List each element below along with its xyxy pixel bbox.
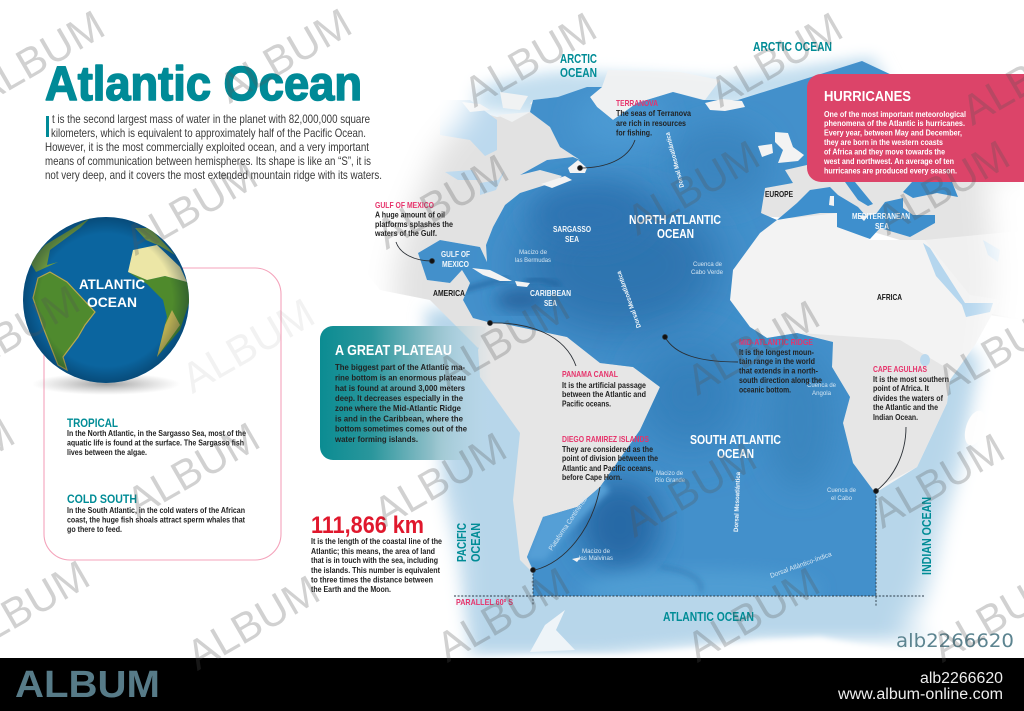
text: coastline	[311, 537, 442, 594]
callout: Terranova: for fishing.	[616, 128, 652, 138]
label: Macizo de Rio Grande: Río Grande	[655, 477, 685, 484]
callout: Diego Ramirez Islands	[562, 434, 658, 482]
land: North America	[340, 80, 580, 348]
label: Gulf of Mexico sea: GULF OF	[441, 249, 470, 259]
text: A Great Plateau: zone where the Mid-Atlantic Ridge	[335, 404, 461, 413]
statistic: coastline length: 111,866 km	[311, 512, 424, 539]
label: Cuenca de Cabo Verde: Cabo Verde	[691, 269, 723, 276]
callout: Mid-Atlantic Ridge	[739, 337, 822, 394]
label: Parallel 60 S: PARALLEL 60º S	[456, 597, 513, 607]
callout: Panama Canal: Pacific oceans.	[562, 400, 611, 408]
label: Africa: AFRICA	[877, 292, 902, 302]
label: Cuenca de Cabo Verde	[691, 261, 723, 276]
label: Cuenca de Cabo Verde: Cuenca de	[693, 261, 722, 268]
text: A Great Plateau: hat is found at around 3,000 meters	[335, 384, 465, 393]
globe	[23, 217, 190, 383]
label: Macizo de las Bermudas	[515, 249, 552, 264]
label: South Atlantic Ocean: OCEAN	[717, 447, 754, 461]
South America on globe	[33, 272, 95, 370]
label: Cuenca de el Cabo: Cuenca de	[827, 487, 856, 494]
parallel 60 S and boundary dotted lines	[454, 492, 925, 606]
islands	[472, 99, 868, 562]
label: Sargasso Sea	[553, 224, 591, 244]
heading: Cold South: COLD SOUTH	[67, 492, 137, 506]
label: Arctic Ocean west: OCEAN	[560, 66, 597, 80]
text: Cold South: go there to feed.	[67, 525, 122, 534]
panel: hurricanes	[807, 74, 1024, 182]
top fade of the map	[440, 20, 1000, 78]
watermarks: ALBUM	[365, 423, 514, 536]
intro paragraph	[45, 112, 382, 182]
label: Atlantic Ocean on globe: ATLANTIC	[79, 276, 145, 292]
left fade of the map	[0, 0, 480, 660]
callout: Cape Agulhas: It is the most southern	[873, 375, 949, 384]
watermarks: ALBUM	[367, 145, 516, 258]
callout: Cape Agulhas: divides the waters of	[873, 394, 943, 403]
label: America: AMERICA	[433, 288, 465, 298]
label: Pacific Ocean: PACIFIC	[455, 523, 469, 562]
watermarks: ALBUM	[178, 566, 327, 679]
globe shadow	[32, 373, 180, 395]
intro paragraph: t is the second largest mass of water in the planet with 82,000,000 square	[52, 112, 370, 126]
heading: A Great Plateau: A GREAT PLATEAU	[335, 342, 452, 359]
text: A Great Plateau: bottom sometimes comes out of the	[335, 424, 467, 434]
Canadian Arctic islands	[462, 92, 558, 122]
label: Dorsal Mesoatlantica central: Dorsal Mesoatlántica	[616, 270, 643, 329]
text: Hurricanes: they are born in the western coasts	[824, 138, 943, 147]
label: Caribbean Sea	[530, 288, 571, 308]
label: Europe: EUROPE	[765, 189, 793, 199]
label: Macizo de Rio Grande: Macizo de	[656, 470, 683, 477]
text: A Great Plateau: The biggest part of the Atlantic ma-	[335, 363, 465, 372]
label: Macizo de las Bermudas: las Bermudas	[515, 257, 552, 264]
watermarks: ALBUM	[678, 558, 827, 671]
callout: Terranova: The seas of Terranova	[616, 109, 691, 118]
panel: a great plateau	[320, 326, 492, 460]
Africa on globe: forest	[128, 272, 190, 357]
callout: Panama Canal: between the Atlantic and	[562, 390, 646, 399]
watermarks: ALBUM	[615, 433, 764, 546]
title: Atlantic Ocean	[45, 58, 362, 111]
label: Dorsal Mesoatlantica south: Dorsal Mesoatlántica	[733, 472, 742, 532]
label: South Atlantic Ocean: SOUTH ATLANTIC	[690, 433, 781, 447]
text: Tropical: aquatic life is found at the surface. The Sargasso fish	[67, 438, 244, 448]
Adriatic and Black Sea	[845, 182, 958, 206]
text: A Great Plateau: rine bottom is an enormous plateau	[335, 374, 466, 382]
text: Hurricanes: hurricanes are produced every season.	[824, 166, 957, 176]
label: Arctic Ocean east: ARCTIC OCEAN	[753, 40, 832, 54]
text: Tropical: lives between the algae.	[67, 448, 147, 457]
callout: Panama Canal	[562, 369, 646, 408]
watermarks: ALBUM	[118, 413, 267, 526]
land: Eurasia	[761, 130, 1020, 320]
intro paragraph: not very deep, and it covers the most extended mountain ridge with its waters.	[45, 168, 382, 182]
callout: Mid-Atlantic Ridge: It is the longest moun-	[739, 348, 814, 357]
callout: Mid-Atlantic Ridge: tain range in the world	[739, 357, 815, 366]
callout: Diego Ramirez Islands: DIEGO RAMIREZ ISLANDS	[562, 434, 649, 444]
text: Hurricanes: phenomena of the Atlantic is hurricanes.	[824, 119, 965, 128]
watermarks: ALBUM	[116, 151, 265, 264]
right fade of the map	[900, 150, 1024, 680]
label: Pacific Ocean: OCEAN	[469, 523, 483, 562]
footer image id: alb2266620	[920, 670, 1003, 687]
label: Mediterranean Sea: SEA	[875, 221, 889, 231]
text: Hurricanes: Every year, between May and December,	[824, 128, 962, 138]
text: Hurricanes: of Africa and they move towards the	[824, 148, 945, 156]
footer bar	[0, 658, 1024, 711]
intro paragraph: However, it is the most commercially exploited ocean, and a very important	[45, 140, 370, 154]
label: Arctic Ocean west: ARCTIC	[560, 52, 597, 66]
label: Dorsal Mesoatlantica north: Dorsal Mesoatlántica	[664, 131, 686, 188]
label: Gulf of Mexico sea: MEXICO	[442, 259, 469, 269]
footer website: www.album-online.com	[837, 686, 1003, 703]
watermarks: ALBUM	[173, 289, 322, 402]
label: North Atlantic Ocean: NORTH ATLANTIC	[629, 213, 721, 227]
label: Pacific Ocean	[455, 523, 483, 562]
label: Caribbean Sea: CARIBBEAN	[530, 288, 571, 298]
watermarks: ALBUM	[428, 283, 577, 396]
callout: Cape Agulhas: Indian Ocean.	[873, 413, 918, 422]
label: Atlantic Ocean south: ATLANTIC OCEAN	[663, 610, 754, 624]
callout: Mid-Atlantic Ridge: south direction along the	[739, 376, 822, 385]
intro paragraph: means of communication between hemispheres. Its shape is like an “S”, it is	[45, 154, 371, 168]
text: Hurricanes: west and northwest. An average of ten	[823, 157, 954, 166]
label: Cuenca de Angola: Angola	[812, 390, 831, 397]
bottom edge of the map	[470, 637, 940, 700]
pale surrounding waters	[425, 300, 985, 655]
text: Cold South: coast, the huge fish shoals attract sperm whales that	[67, 516, 245, 524]
Red Sea, gulfs and African lakes	[923, 243, 993, 317]
ocean	[418, 61, 890, 596]
callout: Gulf of Mexico: waters of the Gulf.	[374, 229, 437, 238]
intro paragraph: kilometers, which is equivalent to approximately half of the Pacific Ocean.	[51, 126, 366, 140]
label: Mediterranean Sea: MEDITERRANEAN	[852, 211, 910, 221]
drop cap bar	[46, 116, 49, 137]
label: Dorsal Atlantico-indica: Dorsal Atlántico-índica	[769, 551, 833, 580]
Africa on globe: south	[157, 310, 180, 357]
watermarks: ALBUM	[678, 291, 827, 404]
label: Caribbean Sea: SEA	[544, 298, 557, 308]
Europe on globe	[135, 228, 175, 255]
land: Arabia	[925, 230, 1024, 320]
footer logo: ALBUM	[15, 664, 160, 706]
land shading: southern Africa	[800, 333, 950, 490]
Africa on globe: Sahara	[128, 245, 187, 282]
label: Cuenca de el Cabo: el Cabo	[831, 495, 852, 502]
callout: Cape Agulhas: point of Africa. It	[873, 384, 929, 393]
text: coastline: that is in touch with the sea, including	[311, 556, 438, 565]
text: A Great Plateau	[334, 363, 467, 444]
callout: Cape Agulhas	[873, 364, 949, 422]
callout: Gulf of Mexico	[374, 200, 453, 238]
callout: Diego Ramirez Islands: They are considered as the	[562, 445, 653, 454]
land: Antarctic Peninsula	[530, 610, 575, 652]
label: Macizo de las Malvinas: las Malvinas	[579, 555, 614, 562]
text: coastline: It is the length of the coastal line of the	[311, 537, 442, 546]
label: Macizo de las Malvinas: Macizo de	[582, 548, 610, 555]
land: Greenland	[590, 70, 720, 120]
callout: Cape Agulhas: the Atlantic and the	[873, 403, 938, 412]
callout: Terranova: TERRANOVA	[616, 98, 658, 108]
label: Plataforma Continental: Plataforma Continental	[548, 496, 589, 552]
label: Cuenca de el Cabo	[827, 487, 856, 502]
callout: Gulf of Mexico: platforms splashes the	[375, 220, 453, 229]
watermarks: ALBUM	[210, 0, 359, 112]
text: Cold South: In the South Atlantic, in the cold waters of the African	[67, 506, 245, 515]
text: A Great Plateau: water forming islands.	[334, 435, 418, 444]
callout: Gulf of Mexico: A huge amount of oil	[375, 210, 445, 220]
label: Gulf of Mexico sea	[441, 249, 470, 269]
land: South America	[478, 322, 660, 573]
watermarks: ALBUM	[428, 558, 577, 671]
text: coastline: to three times the distance between	[311, 576, 433, 584]
callout: Diego Ramirez Islands: Atlantic and Pacific oceans,	[562, 464, 653, 473]
label: North Atlantic Ocean	[629, 213, 721, 241]
label: South Atlantic Ocean	[690, 433, 781, 461]
label: Mediterranean Sea	[852, 211, 910, 231]
callout: Diego Ramirez Islands: point of division between the	[562, 454, 658, 463]
North America on globe	[30, 218, 90, 272]
callout: Diego Ramirez Islands: before Cape Horn.	[562, 473, 622, 482]
text: Hurricanes	[823, 110, 966, 176]
label: Arctic Ocean west	[560, 52, 597, 80]
Mediterranean Sea	[777, 187, 935, 239]
text: coastline: the islands. This number is equivalent	[311, 566, 440, 575]
land: Africa	[730, 213, 1000, 490]
pale northern waters	[470, 50, 890, 115]
text: Cold South	[67, 506, 245, 534]
label: Macizo de las Bermudas: Macizo de	[519, 249, 547, 256]
text: coastline: the Earth and the Moon.	[311, 585, 391, 594]
heading: Hurricanes: HURRICANES	[824, 88, 911, 105]
callout: Gulf of Mexico: GULF OF MEXICO	[375, 200, 434, 210]
callout: Terranova	[616, 98, 691, 138]
label: Sargasso Sea: SEA	[565, 234, 579, 244]
text: Tropical	[67, 429, 246, 457]
label: Sargasso Sea: SARGASSO	[553, 224, 591, 234]
callout: Mid-Atlantic Ridge: that extends in a north-	[739, 366, 818, 376]
watermarks: ALBUM	[863, 424, 1012, 537]
water: Hudson Bay and Great Lakes	[440, 100, 505, 195]
callout lines and location dots	[396, 140, 906, 572]
callout: Terranova: are rich in resources	[616, 119, 686, 128]
image reference number: alb2266620	[896, 630, 1014, 652]
label: Atlantic Ocean on globe: OCEAN	[87, 294, 137, 310]
callout: Mid-Atlantic Ridge: oceanic bottom.	[739, 386, 791, 394]
label: Macizo de Rio Grande	[655, 470, 685, 484]
label: Macizo de las Malvinas	[579, 548, 614, 562]
text: Hurricanes: One of the most important meteorological	[824, 110, 966, 119]
label: Indian Ocean: INDIAN OCEAN	[920, 497, 934, 575]
callout: Cape Agulhas: CAPE AGULHAS	[873, 364, 927, 374]
text: Tropical: In the North Atlantic, in the Sargasso Sea, most of the	[67, 429, 246, 438]
callout: Panama Canal: PANAMA CANAL	[562, 369, 618, 379]
callout: Mid-Atlantic Ridge: MID-ATLANTIC RIDGE	[739, 337, 813, 347]
panel: marine life	[44, 268, 281, 560]
watermarks: ALBUM	[701, 3, 850, 116]
watermarks: ALBUM	[455, 3, 604, 116]
label: Cuenca de Angola: Cuenca de	[807, 382, 836, 389]
Madagascar	[961, 408, 989, 448]
statistic: coastline length	[311, 512, 442, 594]
text: coastline: Atlantic; this means, the area of land	[311, 547, 435, 556]
label: North Atlantic Ocean: OCEAN	[657, 227, 694, 241]
label: Atlantic Ocean on globe	[79, 276, 145, 310]
label: Cuenca de Angola	[807, 382, 836, 397]
callout: Panama Canal: It is the artificial passage	[562, 381, 646, 390]
text: A Great Plateau: is and in the Caribbean, where the	[335, 414, 463, 424]
heading: Tropical: TROPICAL	[67, 416, 118, 430]
watermarks: ALBUM	[618, 131, 767, 244]
text: A Great Plateau: deep. It decreases especially in the	[335, 394, 463, 403]
watermarks: ALBUM	[868, 131, 1017, 244]
sea floor labels	[515, 131, 856, 580]
